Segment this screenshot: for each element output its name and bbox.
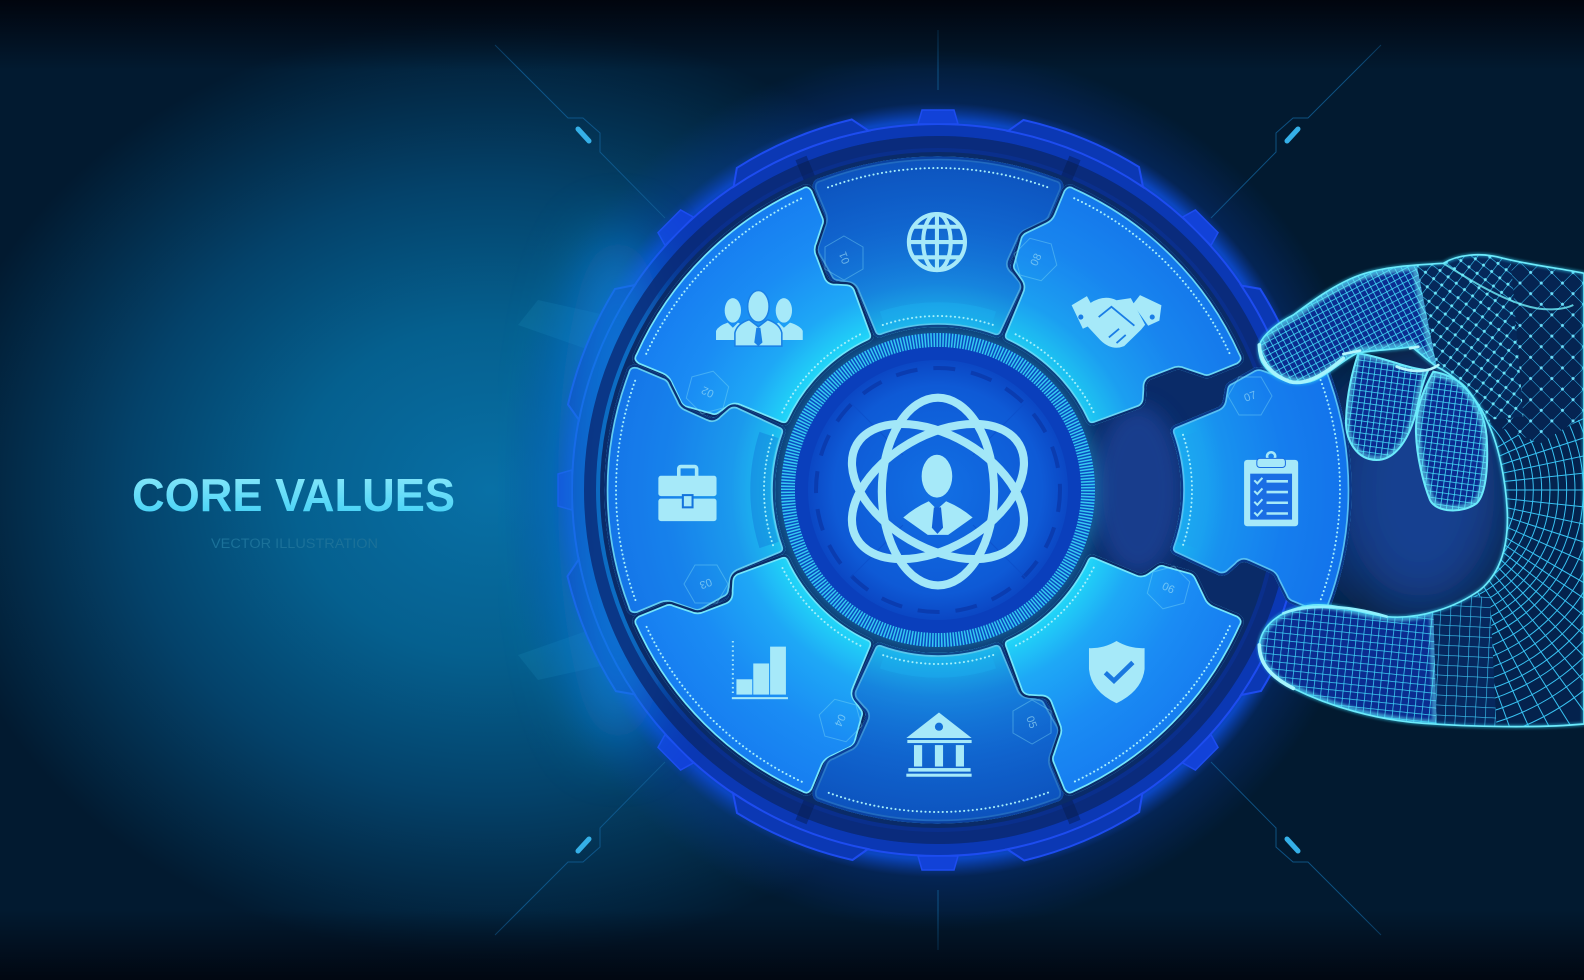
segment 01 <box>813 156 1063 338</box>
icon: shield with check <box>1089 641 1145 703</box>
title: CORE VALUES <box>132 469 455 521</box>
hand palm mesh <box>1417 256 1584 726</box>
middle finger mesh <box>1346 353 1428 460</box>
upper back of hand diamond mesh <box>1496 262 1584 443</box>
icon: bar chart <box>732 641 788 699</box>
subtitle: VECTOR ILLUSTRATION <box>211 536 378 551</box>
wireframe hand <box>1256 251 1584 730</box>
lower palm transition mesh <box>1430 597 1497 730</box>
ring finger mesh <box>1416 372 1487 510</box>
segment 05 <box>813 642 1063 824</box>
icon: globe <box>909 214 965 270</box>
icons layer <box>658 214 1298 777</box>
outer gear ring <box>524 76 1352 904</box>
segment 06: 06 <box>1160 580 1176 597</box>
icon: briefcase <box>658 467 717 521</box>
segment 07 pulled out: 07 <box>1243 389 1258 405</box>
segment 07 pulled out <box>1170 365 1352 615</box>
segment 03 <box>604 365 786 615</box>
segment 02 <box>613 165 919 471</box>
decorative corner connectors with pills <box>495 30 1381 950</box>
upper finger mesh <box>1259 265 1437 383</box>
icon: atom with person <box>829 396 1047 587</box>
segment 03: 03 <box>698 575 713 591</box>
segment 01: 01 <box>837 250 853 265</box>
wheel glow <box>498 50 1378 930</box>
wheel <box>498 50 1378 930</box>
icon: clipboard checklist <box>1244 452 1298 526</box>
segment 08: 08 <box>1028 252 1045 268</box>
hand outline glow <box>1259 255 1584 727</box>
segment 04 <box>613 509 919 815</box>
lower finger mesh <box>1259 605 1437 724</box>
segment 02: 02 <box>700 383 716 400</box>
icon: bank building <box>906 712 972 777</box>
segment 04: 04 <box>831 712 848 728</box>
segment 06 <box>957 509 1263 815</box>
center hub <box>780 332 1096 648</box>
segment 05: 05 <box>1023 715 1039 730</box>
icon: team of people <box>716 291 803 346</box>
icon: handshake <box>1072 295 1161 348</box>
left side light rays <box>518 300 628 680</box>
segment 08 <box>957 165 1263 471</box>
